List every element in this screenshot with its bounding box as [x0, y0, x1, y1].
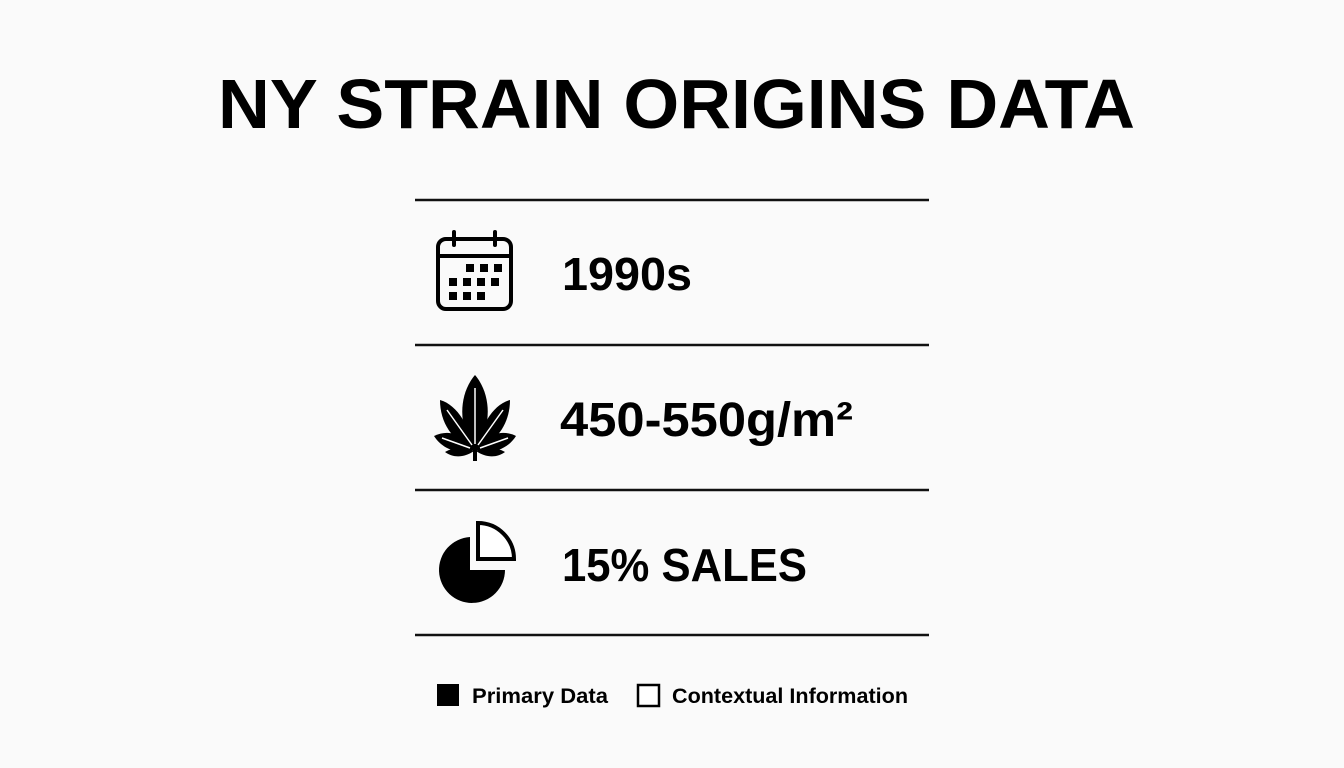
legend: Primary Data	[472, 685, 608, 708]
legend: Contextual Information	[672, 685, 908, 708]
value: yield: 450-550g/m²	[560, 394, 853, 447]
row: 1990s	[438, 232, 692, 309]
value: 1990s: 1990s	[562, 248, 692, 300]
icon: pie chart	[439, 523, 514, 603]
icon: cannabis leaf	[434, 375, 516, 461]
row: yield	[434, 375, 853, 461]
legend	[437, 684, 908, 708]
title: NY STRAIN ORIGINS DATA	[218, 65, 1135, 143]
icon: calendar	[438, 232, 511, 309]
value: sales: 15% SALES	[562, 539, 807, 591]
row: sales	[439, 523, 807, 603]
